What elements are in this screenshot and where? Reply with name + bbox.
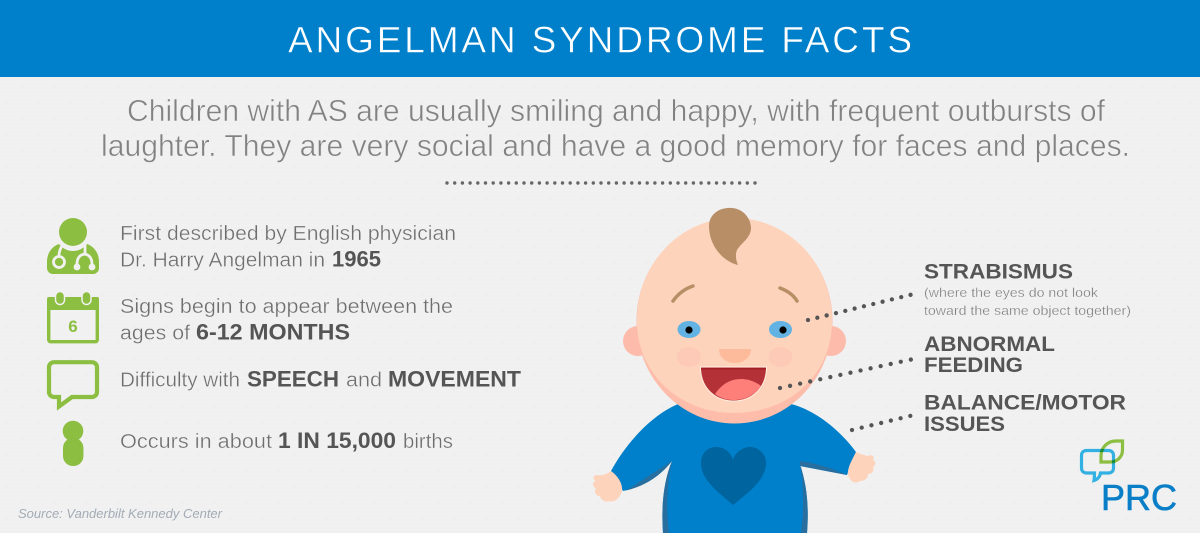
label: balance motor issues: ISSUES — [924, 412, 1005, 436]
fact: incidence: births — [403, 430, 453, 453]
body and arms — [611, 404, 856, 533]
facts list — [120, 222, 522, 453]
fact: first described — [120, 222, 456, 272]
source note: Source: Vanderbilt Kennedy Center — [18, 506, 223, 521]
fact: incidence: Occurs in about — [120, 430, 272, 453]
callout pointer: strabismus — [808, 293, 918, 320]
heart — [701, 447, 766, 505]
fact: signs begin: ages of — [120, 322, 190, 344]
PRC logo: PRC — [1101, 477, 1177, 518]
baby illustration — [593, 208, 875, 533]
icon: calendar: 6 — [68, 317, 78, 336]
label: abnormal feeding — [924, 332, 1055, 377]
label: strabismus — [924, 260, 1131, 318]
title: ANGELMAN SYNDROME FACTS — [288, 20, 912, 60]
callout labels — [924, 260, 1131, 436]
label: strabismus: STRABISMUS — [924, 260, 1073, 284]
hair tuft — [709, 208, 751, 265]
header banner — [0, 0, 1200, 77]
nose — [719, 349, 751, 363]
intro paragraph: laughter. They are very social and have a good memory for faces and places. — [101, 128, 1130, 163]
label: strabismus: toward the same object together) — [924, 304, 1131, 318]
right hand — [848, 452, 875, 483]
fact: signs begin: Signs begin to appear between the — [120, 295, 453, 318]
label: balance motor issues: BALANCE/MOTOR — [924, 390, 1126, 414]
fact: signs begin: 6-12 MONTHS — [196, 320, 350, 344]
fact: first described: First described by English physician — [120, 222, 456, 245]
eyebrows — [673, 286, 797, 301]
callout pointer: abnormal feeding — [780, 358, 918, 388]
fact: incidence: 1 IN 15,000 — [278, 428, 396, 453]
ears — [623, 326, 846, 356]
fact: first described: Dr. Harry Angelman in — [120, 248, 325, 272]
PRC logo — [1082, 441, 1177, 518]
cheeks — [677, 347, 792, 367]
fact: signs begin — [120, 295, 453, 344]
fact: first described: 1965 — [332, 246, 381, 272]
label: strabismus: (where the eyes do not look — [924, 286, 1099, 300]
icon: baby silhouette — [63, 421, 83, 466]
fact: speech and movement: and — [346, 368, 382, 392]
eyes — [678, 321, 792, 338]
mouth — [700, 367, 766, 401]
intro paragraph: Children with AS are usually smiling and happy, with frequent outbursts of — [127, 93, 1105, 128]
fact: speech and movement: SPEECH — [247, 366, 339, 392]
label: abnormal feeding: FEEDING — [924, 353, 1023, 377]
fact: speech and movement — [120, 366, 522, 392]
dotted divider — [447, 181, 755, 185]
callout pointer: balance — [852, 414, 918, 430]
intro paragraph — [101, 93, 1130, 163]
head — [636, 218, 832, 424]
left hand — [593, 471, 622, 502]
fact: speech and movement: MOVEMENT — [388, 366, 522, 392]
icon: calendar — [47, 292, 99, 342]
label: abnormal feeding: ABNORMAL — [924, 332, 1055, 356]
fact: speech and movement: Difficulty with — [120, 368, 240, 392]
icon: doctor — [47, 218, 99, 274]
fact: incidence — [120, 428, 453, 453]
label: balance motor issues — [924, 390, 1126, 436]
icon: speech bubble — [49, 362, 97, 406]
